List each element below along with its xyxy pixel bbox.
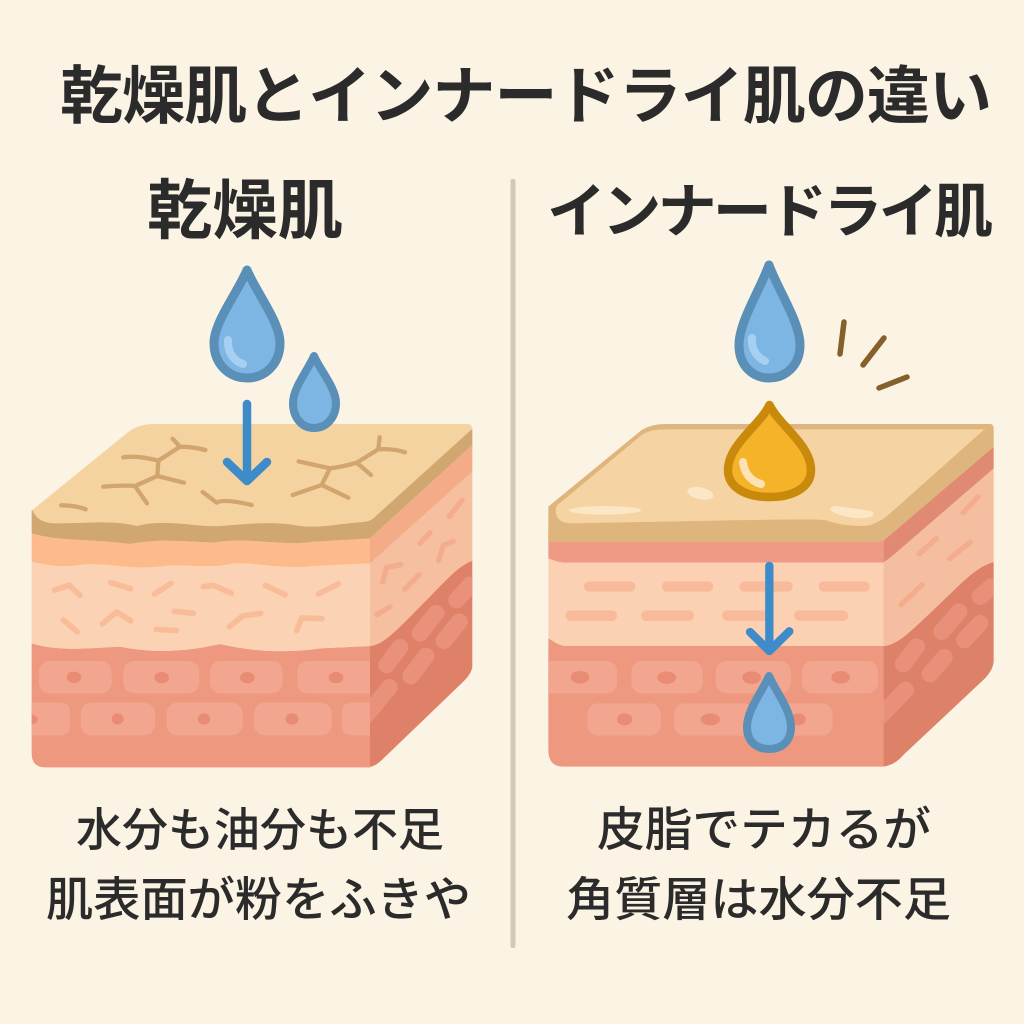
front layer: lower skin cells [32,643,370,767]
caption: inner dry skin: 角質層は水分不足 [566,873,951,926]
icon: large water drop [214,270,280,378]
icon: oil drop [728,405,811,497]
caption: dry skin: 肌表面が粉をふきや [46,873,471,926]
front layer: orange epidermis [32,533,370,567]
icon: shine marks [840,322,907,388]
caption: inner dry skin [566,803,951,926]
side face: layers [367,428,472,767]
icon: water drop leaving skin [747,676,791,749]
caption: dry skin: 水分も油分も不足 [76,804,444,856]
front layer: red epidermis [548,530,883,563]
panel: inner dry skin [547,179,994,926]
heading: inner dry skin: インナードライ肌 [547,179,993,245]
icon: small water drop [293,356,336,428]
skin cross-section block: dry [32,424,472,767]
front layer: lower skin cells [548,638,883,767]
title: 乾燥肌とインナードライ肌の違い [60,62,992,132]
skin cross-section block: inner dry [548,424,994,767]
heading: dry skin: 乾燥肌 [147,174,343,247]
front layer: pale dermis [548,558,883,646]
arrow: water moving into dry skin [227,404,267,481]
caption: inner dry skin: 皮脂でテカるが [597,803,931,856]
front layer: pale dermis [32,562,370,651]
divider between panels [510,179,516,948]
caption: dry skin [46,804,471,926]
top face with glossy sebum [548,424,994,542]
arrow: water escaping [750,566,789,651]
side face: layers [882,447,994,767]
top face with cracks [32,424,472,544]
icon: water drop above skin [739,265,800,378]
panel: dry skin [32,174,472,926]
